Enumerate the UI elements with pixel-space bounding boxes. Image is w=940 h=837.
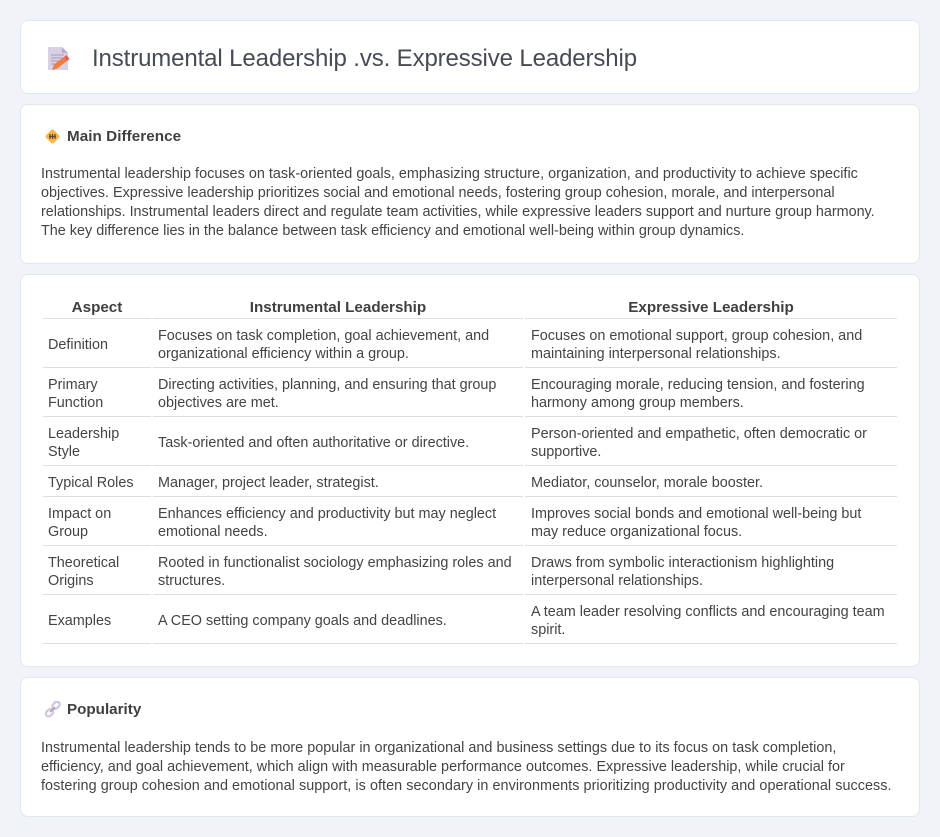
row: definition xyxy=(48,328,862,362)
row: impact on group: Group xyxy=(48,524,88,540)
row: theoretical origins: structures. xyxy=(158,573,225,589)
row: primary function: Function xyxy=(48,395,103,411)
row: typical roles: Mediator, counselor, morale booster. xyxy=(531,475,763,491)
main difference text: The key difference lies in the balance between task efficiency and emotional well-being within group dynamics. xyxy=(41,223,744,239)
row: theoretical origins: Theoretical xyxy=(48,555,119,571)
row: impact on group xyxy=(48,506,862,540)
title: Instrumental Leadership .vs. Expressive Leadership xyxy=(92,45,637,72)
row: definition: Focuses on task completion, goal achievement, and xyxy=(158,328,489,344)
row: impact on group: may reduce organizational focus. xyxy=(531,524,742,540)
row: examples xyxy=(48,604,885,638)
row: examples: A team leader resolving conflicts and encouraging team xyxy=(531,604,885,620)
panel: popularity xyxy=(20,677,920,817)
row: leadership style: Person-oriented and empathetic, often democratic or xyxy=(531,426,867,442)
icon: chain link xyxy=(44,701,61,718)
row: leadership style xyxy=(48,426,867,460)
popularity text xyxy=(41,740,892,794)
row: typical roles: Typical Roles xyxy=(48,475,134,491)
row: definition: maintaining interpersonal relationships. xyxy=(531,346,781,362)
row: theoretical origins: Draws from symbolic interactionism highlighting xyxy=(531,555,834,571)
row: primary function: Primary xyxy=(48,377,98,393)
panel: main difference xyxy=(20,104,920,264)
table header: instrumental leadership: Instrumental Leadership xyxy=(250,299,426,316)
row: definition: Focuses on emotional support, group cohesion, and xyxy=(531,328,862,344)
icon: document with pencil xyxy=(48,47,70,70)
table header: aspect: Aspect xyxy=(72,299,122,316)
popularity text: efficiency, and goal achievement, which align with measurable performance outcomes. Expressive leadership, while crucial for xyxy=(41,759,845,775)
panel: comparison table xyxy=(20,274,920,667)
main difference text: objectives. Expressive leadership prioritizes social and emotional needs, fostering group cohesion, morale, and interpersonal xyxy=(41,185,835,201)
row: impact on group: Impact on xyxy=(48,506,111,522)
row: leadership style: Task-oriented and often authoritative or directive. xyxy=(158,435,469,451)
header card xyxy=(20,20,920,94)
popularity text: Instrumental leadership tends to be more popular in organizational and business settings due to its focus on task completion, xyxy=(41,740,836,756)
table header: expressive leadership: Expressive Leadership xyxy=(628,299,794,316)
row: theoretical origins: interpersonal relationships. xyxy=(531,573,703,589)
row: impact on group: Improves social bonds and emotional well-being but xyxy=(531,506,861,522)
row: leadership style: supportive. xyxy=(531,444,601,460)
main difference text xyxy=(41,166,875,239)
row: definition: Definition xyxy=(48,337,108,353)
main difference text: Instrumental leadership focuses on task-oriented goals, emphasizing structure, organization, and productivity to achieve specific xyxy=(41,166,858,182)
row: examples: Examples xyxy=(48,613,111,629)
row: primary function xyxy=(48,377,865,411)
row: theoretical origins: Rooted in functionalist sociology emphasizing roles and xyxy=(158,555,512,571)
row: primary function: objectives are met. xyxy=(158,395,279,411)
row: primary function: harmony among group members. xyxy=(531,395,744,411)
row: typical roles xyxy=(48,475,763,491)
row: impact on group: Enhances efficiency and productivity but may neglect xyxy=(158,506,496,522)
heading: popularity: Popularity xyxy=(67,701,141,718)
row: primary function: Encouraging morale, reducing tension, and fostering xyxy=(531,377,865,393)
row: theoretical origins xyxy=(48,555,834,589)
row: examples: spirit. xyxy=(531,622,565,638)
popularity text: fostering group cohesion and emotional support, is often secondary in environments prioritizing productivity and operational success. xyxy=(41,778,892,794)
row: leadership style: Leadership xyxy=(48,426,119,442)
icon: warning diamond xyxy=(46,129,60,144)
row: theoretical origins: Origins xyxy=(48,573,94,589)
row: examples: A CEO setting company goals and deadlines. xyxy=(158,613,447,629)
row: definition: organizational efficiency within a group. xyxy=(158,346,409,362)
row: typical roles: Manager, project leader, strategist. xyxy=(158,475,379,491)
row: leadership style: Style xyxy=(48,444,80,460)
heading: main difference: Main Difference xyxy=(67,128,181,145)
main difference text: relationships. Instrumental leaders direct and regulate team activities, while expressive leaders support and nurture group harmony. xyxy=(41,204,875,220)
row: impact on group: emotional needs. xyxy=(158,524,268,540)
row: primary function: Directing activities, planning, and ensuring that group xyxy=(158,377,496,393)
